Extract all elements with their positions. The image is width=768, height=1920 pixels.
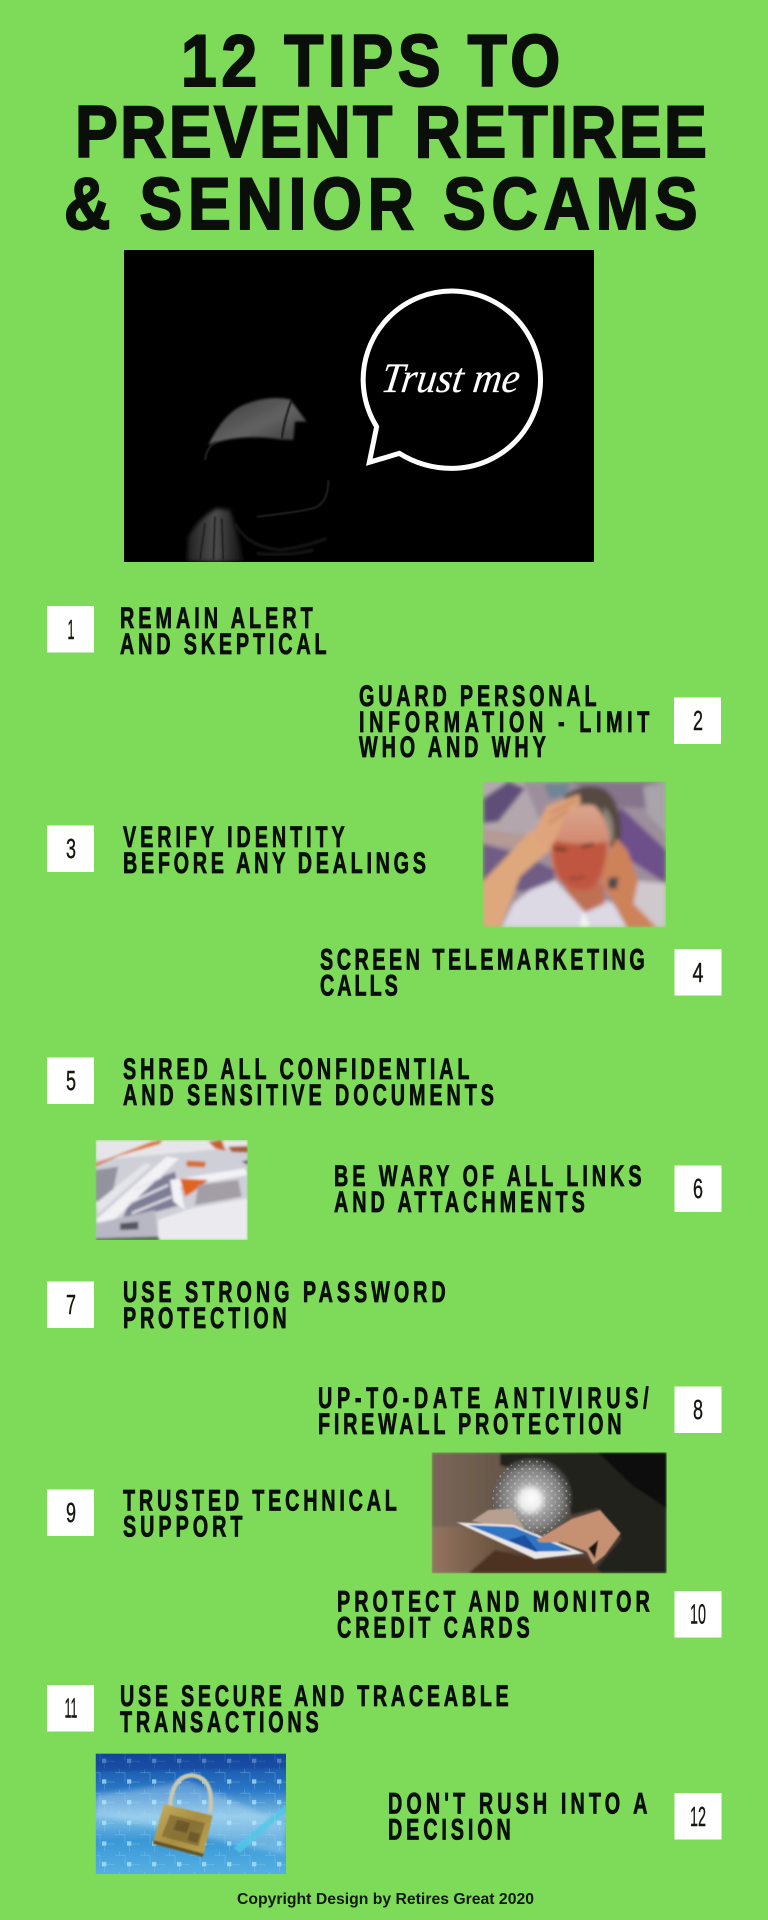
tip 2: 2: [693, 705, 703, 736]
photo: golden padlock on circuit background: [96, 1754, 286, 1874]
hooded figure: [187, 398, 328, 562]
tip 9: [47, 1485, 397, 1544]
tip 9: SUPPORT: [123, 1511, 243, 1544]
tip 9: TRUSTED TECHNICAL: [123, 1485, 397, 1518]
tip 5: [47, 1053, 494, 1112]
tip 4: CALLS: [320, 970, 398, 1003]
face: [550, 805, 610, 891]
speech bubble: [363, 291, 541, 468]
title: PREVENT RETIREE: [75, 91, 707, 173]
tip 8: FIREWALL PROTECTION: [318, 1408, 622, 1441]
title: [64, 20, 707, 245]
tip 2: INFORMATION - LIMIT: [359, 706, 650, 739]
tip 8: 8: [693, 1394, 703, 1425]
tip 11: 11: [64, 1692, 78, 1724]
tip 10: PROTECT AND MONITOR: [337, 1586, 650, 1619]
tip 10: 10: [690, 1598, 706, 1630]
tip 9: 9: [66, 1497, 76, 1528]
tip 2: WHO AND WHY: [359, 731, 546, 764]
tip 5: SHRED ALL CONFIDENTIAL: [123, 1053, 470, 1086]
tip 3: [47, 821, 426, 880]
tip 5: 5: [66, 1065, 76, 1096]
tip 8: UP-TO-DATE ANTIVIRUS/: [318, 1382, 649, 1415]
tip 6: 6: [693, 1173, 703, 1204]
tip 1: [47, 602, 327, 661]
tip 4: SCREEN TELEMARKETING: [320, 944, 645, 977]
tip 2: GUARD PERSONAL: [359, 680, 597, 713]
tip 6: BE WARY OF ALL LINKS: [334, 1160, 642, 1193]
padlock: [153, 1775, 213, 1857]
title: & SENIOR SCAMS: [64, 163, 698, 245]
tip 1: REMAIN ALERT: [120, 602, 313, 635]
tip 3: 3: [66, 833, 76, 864]
tip 12: [388, 1788, 722, 1847]
tip 1: 1: [68, 614, 74, 645]
tip 10: CREDIT CARDS: [337, 1612, 530, 1645]
photo: worried man on phone: [483, 782, 666, 927]
tip 10: [337, 1586, 722, 1645]
tip 4: [320, 944, 722, 1003]
photo: hand on tablet with digital globe: [432, 1452, 667, 1573]
tip 11: TRANSACTIONS: [120, 1706, 319, 1739]
tip 11: USE SECURE AND TRACEABLE: [120, 1680, 509, 1713]
tip 6: [334, 1160, 722, 1219]
tip 5: AND SENSITIVE DOCUMENTS: [123, 1079, 494, 1112]
tip 12: DECISION: [388, 1814, 511, 1847]
shirt: [502, 880, 627, 927]
tip 7: PROTECTION: [123, 1302, 287, 1335]
tip 3: VERIFY IDENTITY: [123, 821, 345, 854]
tip 3: BEFORE ANY DEALINGS: [123, 847, 426, 880]
title: 12 TIPS TO: [181, 20, 560, 102]
speech bubble text: Trust me: [379, 355, 523, 402]
tip 7: USE STRONG PASSWORD: [123, 1276, 446, 1309]
neck: [565, 880, 605, 913]
tip 7: [47, 1276, 446, 1335]
tip 8: [318, 1382, 722, 1441]
tip 2: [359, 680, 721, 764]
photo: shredded paper: [96, 1140, 248, 1241]
tip 6: AND ATTACHMENTS: [334, 1186, 585, 1219]
hand with phone: [602, 838, 657, 927]
tip 12: 12: [690, 1801, 706, 1832]
tip 12: DON'T RUSH INTO A: [388, 1788, 647, 1821]
copyright footer: Copyright Design by Retires Great 2020: [237, 1891, 534, 1908]
hair: [563, 786, 621, 850]
arm and hand on head: [483, 830, 552, 927]
hero image: hooded figure with speech bubble: [124, 250, 594, 562]
tip 1: AND SKEPTICAL: [120, 628, 327, 661]
tip 7: 7: [66, 1289, 76, 1320]
tip 4: 4: [692, 957, 704, 988]
tip 11: [47, 1680, 509, 1739]
